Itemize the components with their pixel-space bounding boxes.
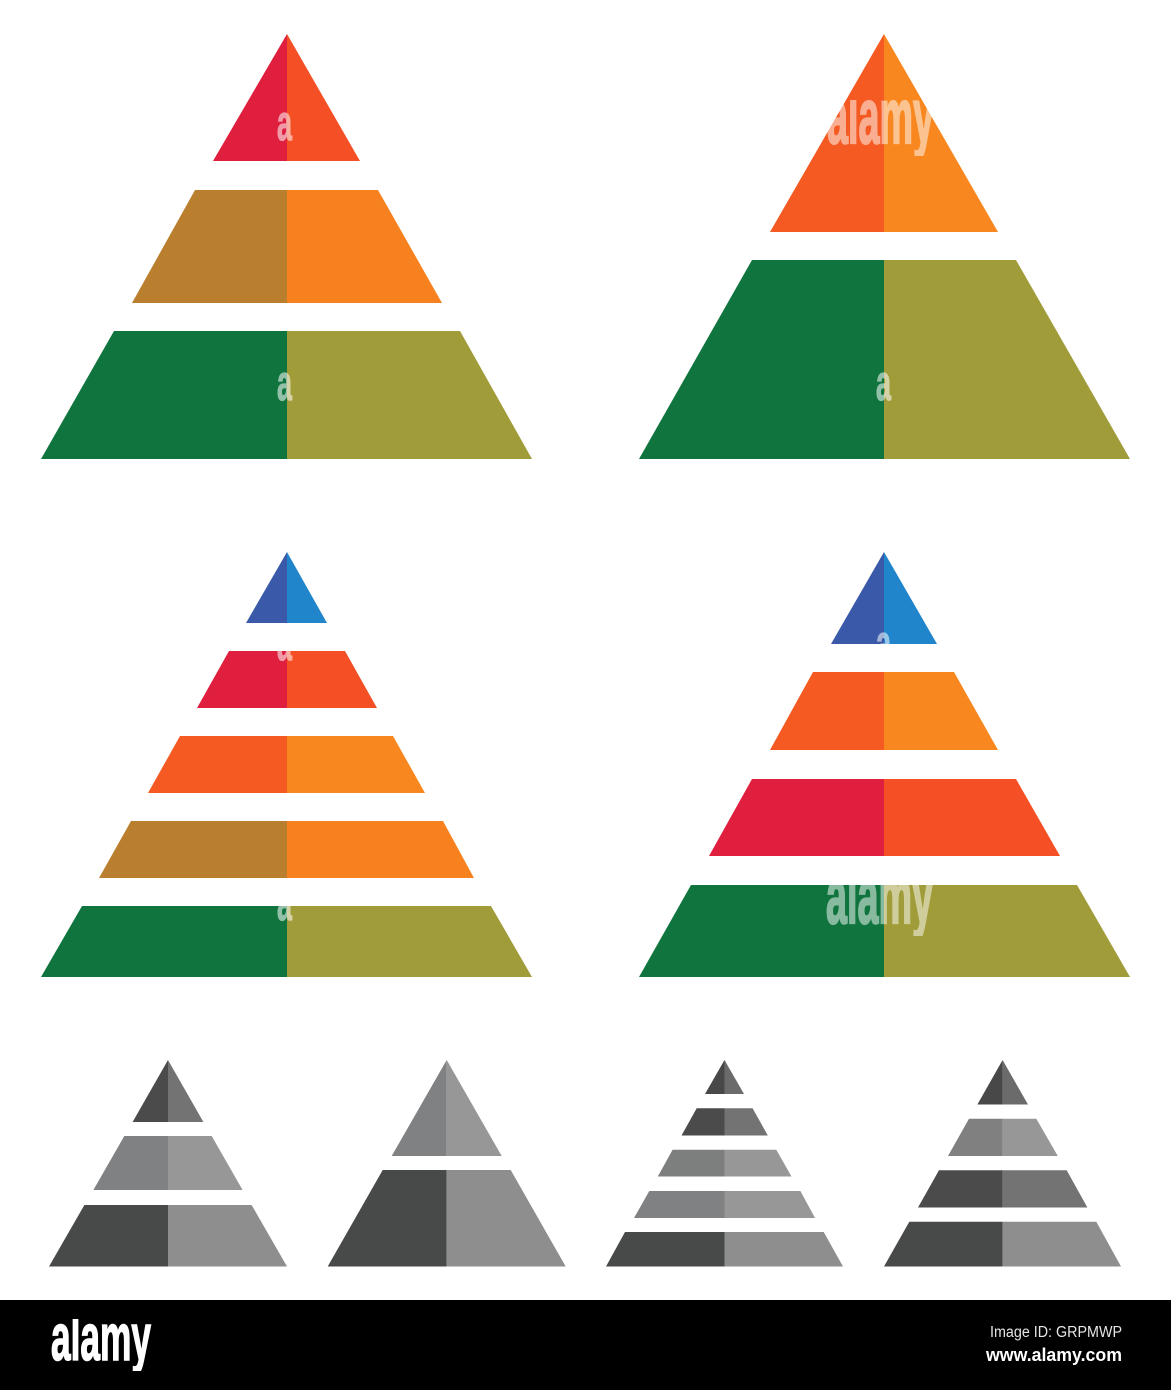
tier 4: brown and orange xyxy=(99,821,474,878)
tier 4 xyxy=(884,1222,1121,1266)
pyramid: grey two-tier xyxy=(328,1060,566,1266)
tier 5: green and olive xyxy=(41,906,532,977)
tier 2: red xyxy=(197,651,377,708)
tier 2 xyxy=(93,1136,243,1190)
tier 1 xyxy=(705,1060,744,1094)
watermark fragment: pyramid 1 top: a xyxy=(277,95,293,151)
text: alamy xyxy=(827,72,934,160)
pyramid: colour two-tier xyxy=(639,34,1130,459)
tier 1 xyxy=(392,1060,502,1156)
watermark fragment: pyramid 3 second tier: a xyxy=(277,615,293,671)
tier 1: blue apex xyxy=(246,552,327,623)
tier 1: orange apex xyxy=(770,34,998,232)
tier 1: blue apex xyxy=(831,552,937,644)
watermarks over the pyramids xyxy=(277,72,934,940)
tier 1 xyxy=(977,1060,1028,1104)
tier 2 xyxy=(948,1119,1058,1156)
website: www.alamy.com xyxy=(985,1344,1122,1365)
pyramid: colour four-tier xyxy=(639,552,1130,977)
tier 2: green and olive xyxy=(639,260,1130,459)
tier 4 xyxy=(634,1191,815,1218)
tier 3: orange xyxy=(148,736,425,793)
pyramid: grey five-tier xyxy=(606,1060,843,1266)
footer bar xyxy=(0,1300,1171,1390)
tier 1: red apex xyxy=(213,34,360,161)
watermark fragment: pyramid 1 base: a xyxy=(277,355,293,411)
text: alamy xyxy=(826,852,933,940)
watermark fragment: pyramid 2 base: a xyxy=(876,355,892,411)
tier 1 xyxy=(133,1060,203,1122)
tier 2: orange xyxy=(770,672,998,750)
pyramid: colour five-tier xyxy=(41,552,532,977)
watermark fragment: pyramid 4 apex: a xyxy=(876,615,892,671)
pyramid: colour three-tier xyxy=(41,34,532,459)
watermark fragment: pyramid 3 base: a xyxy=(277,875,293,931)
tier 2 xyxy=(328,1170,566,1266)
tier 3: red xyxy=(709,779,1060,856)
tier 3: green and olive xyxy=(41,331,532,459)
tier 4: green and olive xyxy=(639,885,1130,977)
tier 3 xyxy=(918,1170,1087,1208)
tier 2: brown and orange xyxy=(132,190,442,303)
tier 3 xyxy=(658,1150,792,1176)
pyramid: grey three-tier xyxy=(49,1060,287,1266)
footer logo: alamy xyxy=(51,1300,151,1374)
image id: Image ID: GRPMWP xyxy=(990,1324,1122,1341)
pyramid: grey four-tier xyxy=(884,1060,1121,1266)
tier 5 xyxy=(606,1232,843,1266)
tier 2 xyxy=(682,1108,768,1136)
tier 3 xyxy=(49,1205,287,1266)
